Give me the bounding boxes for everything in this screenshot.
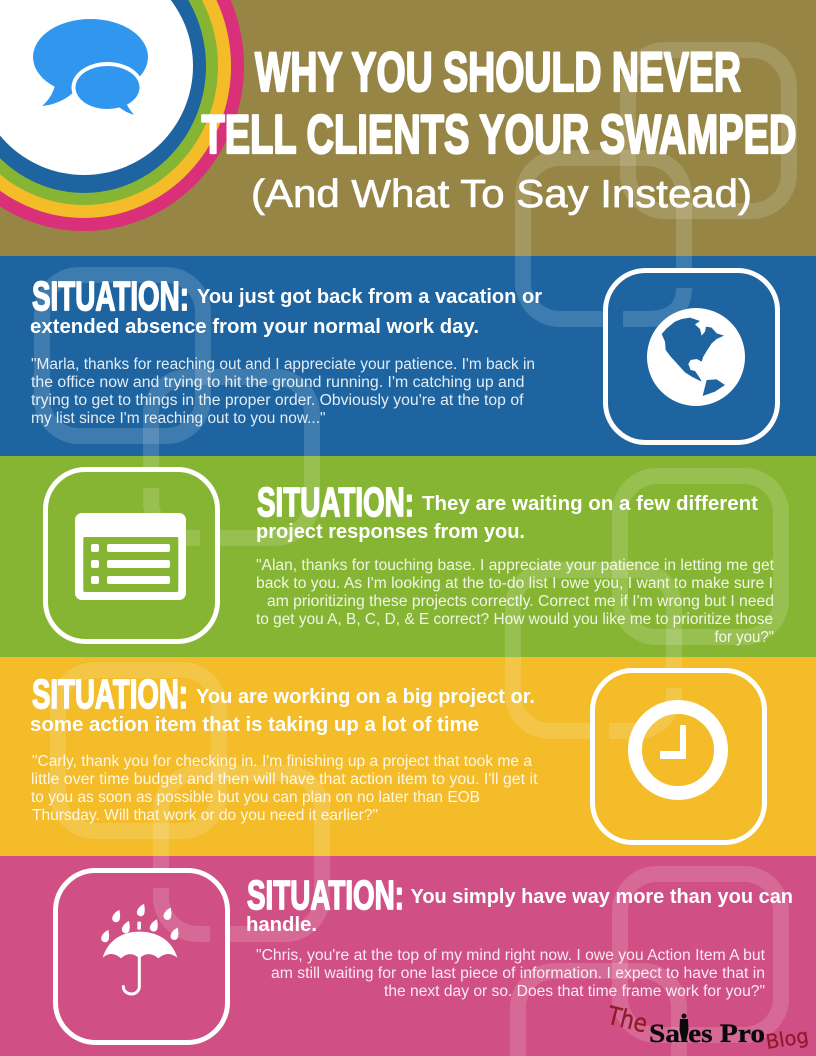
quote text: "Alan, thanks for touching base. I appreciate your patience in letting me get — [256, 557, 775, 574]
subtitle: (And What To Say Instead) — [251, 173, 752, 216]
quote text: trying to get to things in the proper order. Obviously you're at the top of — [31, 392, 524, 409]
icon: globe — [606, 270, 778, 442]
logo: The Sales Pro Blog: The — [604, 1000, 650, 1038]
situation 2 content — [46, 470, 775, 646]
situation 4 content — [56, 870, 793, 1042]
quote text — [256, 557, 775, 646]
quote text: "Marla, thanks for reaching out and I appreciate your patience. I'm back in — [31, 356, 535, 373]
quote text — [31, 356, 535, 427]
panel: situation 1 background — [0, 256, 816, 456]
quote text: for you?" — [714, 629, 774, 646]
quote text: little over time budget and then will have that action item to you. I'll get it — [31, 771, 538, 788]
quote text: back to you. As I'm looking at the to-do list I owe you, I want to make sure I — [256, 575, 773, 592]
heading: They are waiting on a few different — [422, 492, 758, 515]
quote text: am prioritizing these projects correctly. Correct me if I'm wrong but I need — [267, 593, 774, 610]
heading — [256, 479, 758, 543]
logo: The Sales Pro Blog: Blog — [764, 1024, 810, 1054]
quote text: the office now and trying to hit the ground running. I'm catching up and — [31, 374, 524, 391]
panel: header background — [0, 0, 816, 256]
quote text: the next day or so. Does that time frame work for you?" — [384, 983, 765, 1000]
quote text: to get you A, B, C, D, & E correct? How would you like me to prioritize those — [256, 611, 773, 628]
situation 1 content — [30, 270, 778, 442]
icon: clock — [592, 670, 764, 842]
heading — [30, 671, 535, 736]
logo: The Sales Pro Blog: Sales Pro — [649, 1019, 765, 1048]
heading — [30, 273, 542, 338]
heading: handle. — [246, 913, 317, 936]
heading: SITUATION: — [32, 671, 188, 717]
heading: You simply have way more than you can — [410, 885, 793, 908]
panel: situation 2 background — [0, 456, 816, 657]
heading: You are working on a big project or. — [196, 685, 535, 708]
logo: The Sales Pro Blog — [604, 1000, 810, 1054]
quote text: Thursday. Will that work or do you need it earlier?" — [32, 807, 378, 824]
panel: situation 3 background — [0, 657, 816, 856]
title — [202, 40, 796, 165]
heading: You just got back from a vacation or — [197, 285, 542, 308]
icon: umbrella in rain — [56, 870, 228, 1042]
heading: project responses from you. — [256, 520, 525, 543]
heading: some action item that is taking up a lot of time — [30, 713, 479, 736]
heading: SITUATION: — [32, 273, 189, 319]
quote text: am still waiting for one last piece of information. I expect to have that in — [271, 965, 765, 982]
icon: businessman figure — [680, 1014, 688, 1042]
heading: extended absence from your normal work day. — [30, 315, 479, 338]
quote text: to you as soon as possible but you can plan on no later than EOB — [31, 789, 480, 806]
icon: speech bubbles — [33, 19, 148, 115]
rainbow circle badge — [0, 0, 244, 231]
quote text: "Carly, thank you for checking in. I'm finishing up a project that took me a — [32, 753, 532, 770]
quote text: my list since I'm reaching out to you now..." — [31, 410, 326, 427]
heading: SITUATION: — [257, 479, 414, 525]
panel: situation 4 background — [0, 856, 816, 1056]
quote text: "Chris, you're at the top of my mind right now. I owe you Action Item A but — [256, 947, 766, 964]
quote text — [256, 947, 766, 1000]
heading: SITUATION: — [247, 872, 404, 918]
heading — [246, 872, 793, 936]
quote text — [31, 753, 538, 824]
situation 3 content — [30, 670, 764, 842]
icon: list window — [46, 470, 218, 642]
